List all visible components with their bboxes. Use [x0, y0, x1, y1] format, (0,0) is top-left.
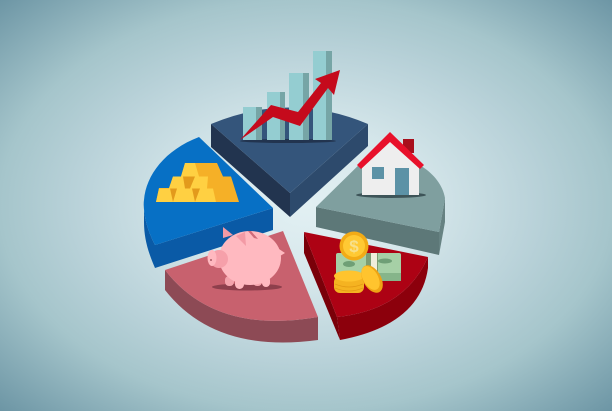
- icon: bar chart: [240, 51, 336, 143]
- icon: money and coins: [334, 232, 401, 296]
- pie slice: grey-green house segment: [316, 152, 445, 255]
- pie slice: red money segment: [304, 232, 428, 340]
- pie slice: pink piggy segment: [165, 231, 318, 343]
- dollar sign: $: [349, 237, 359, 256]
- icon: house: [356, 132, 426, 198]
- icon: piggy bank: [208, 227, 285, 290]
- icon: red growth arrow: [240, 70, 340, 140]
- pie slice: navy chart segment: [211, 108, 368, 217]
- pie slice: blue gold segment: [144, 137, 273, 268]
- icon: gold bars: [156, 163, 239, 202]
